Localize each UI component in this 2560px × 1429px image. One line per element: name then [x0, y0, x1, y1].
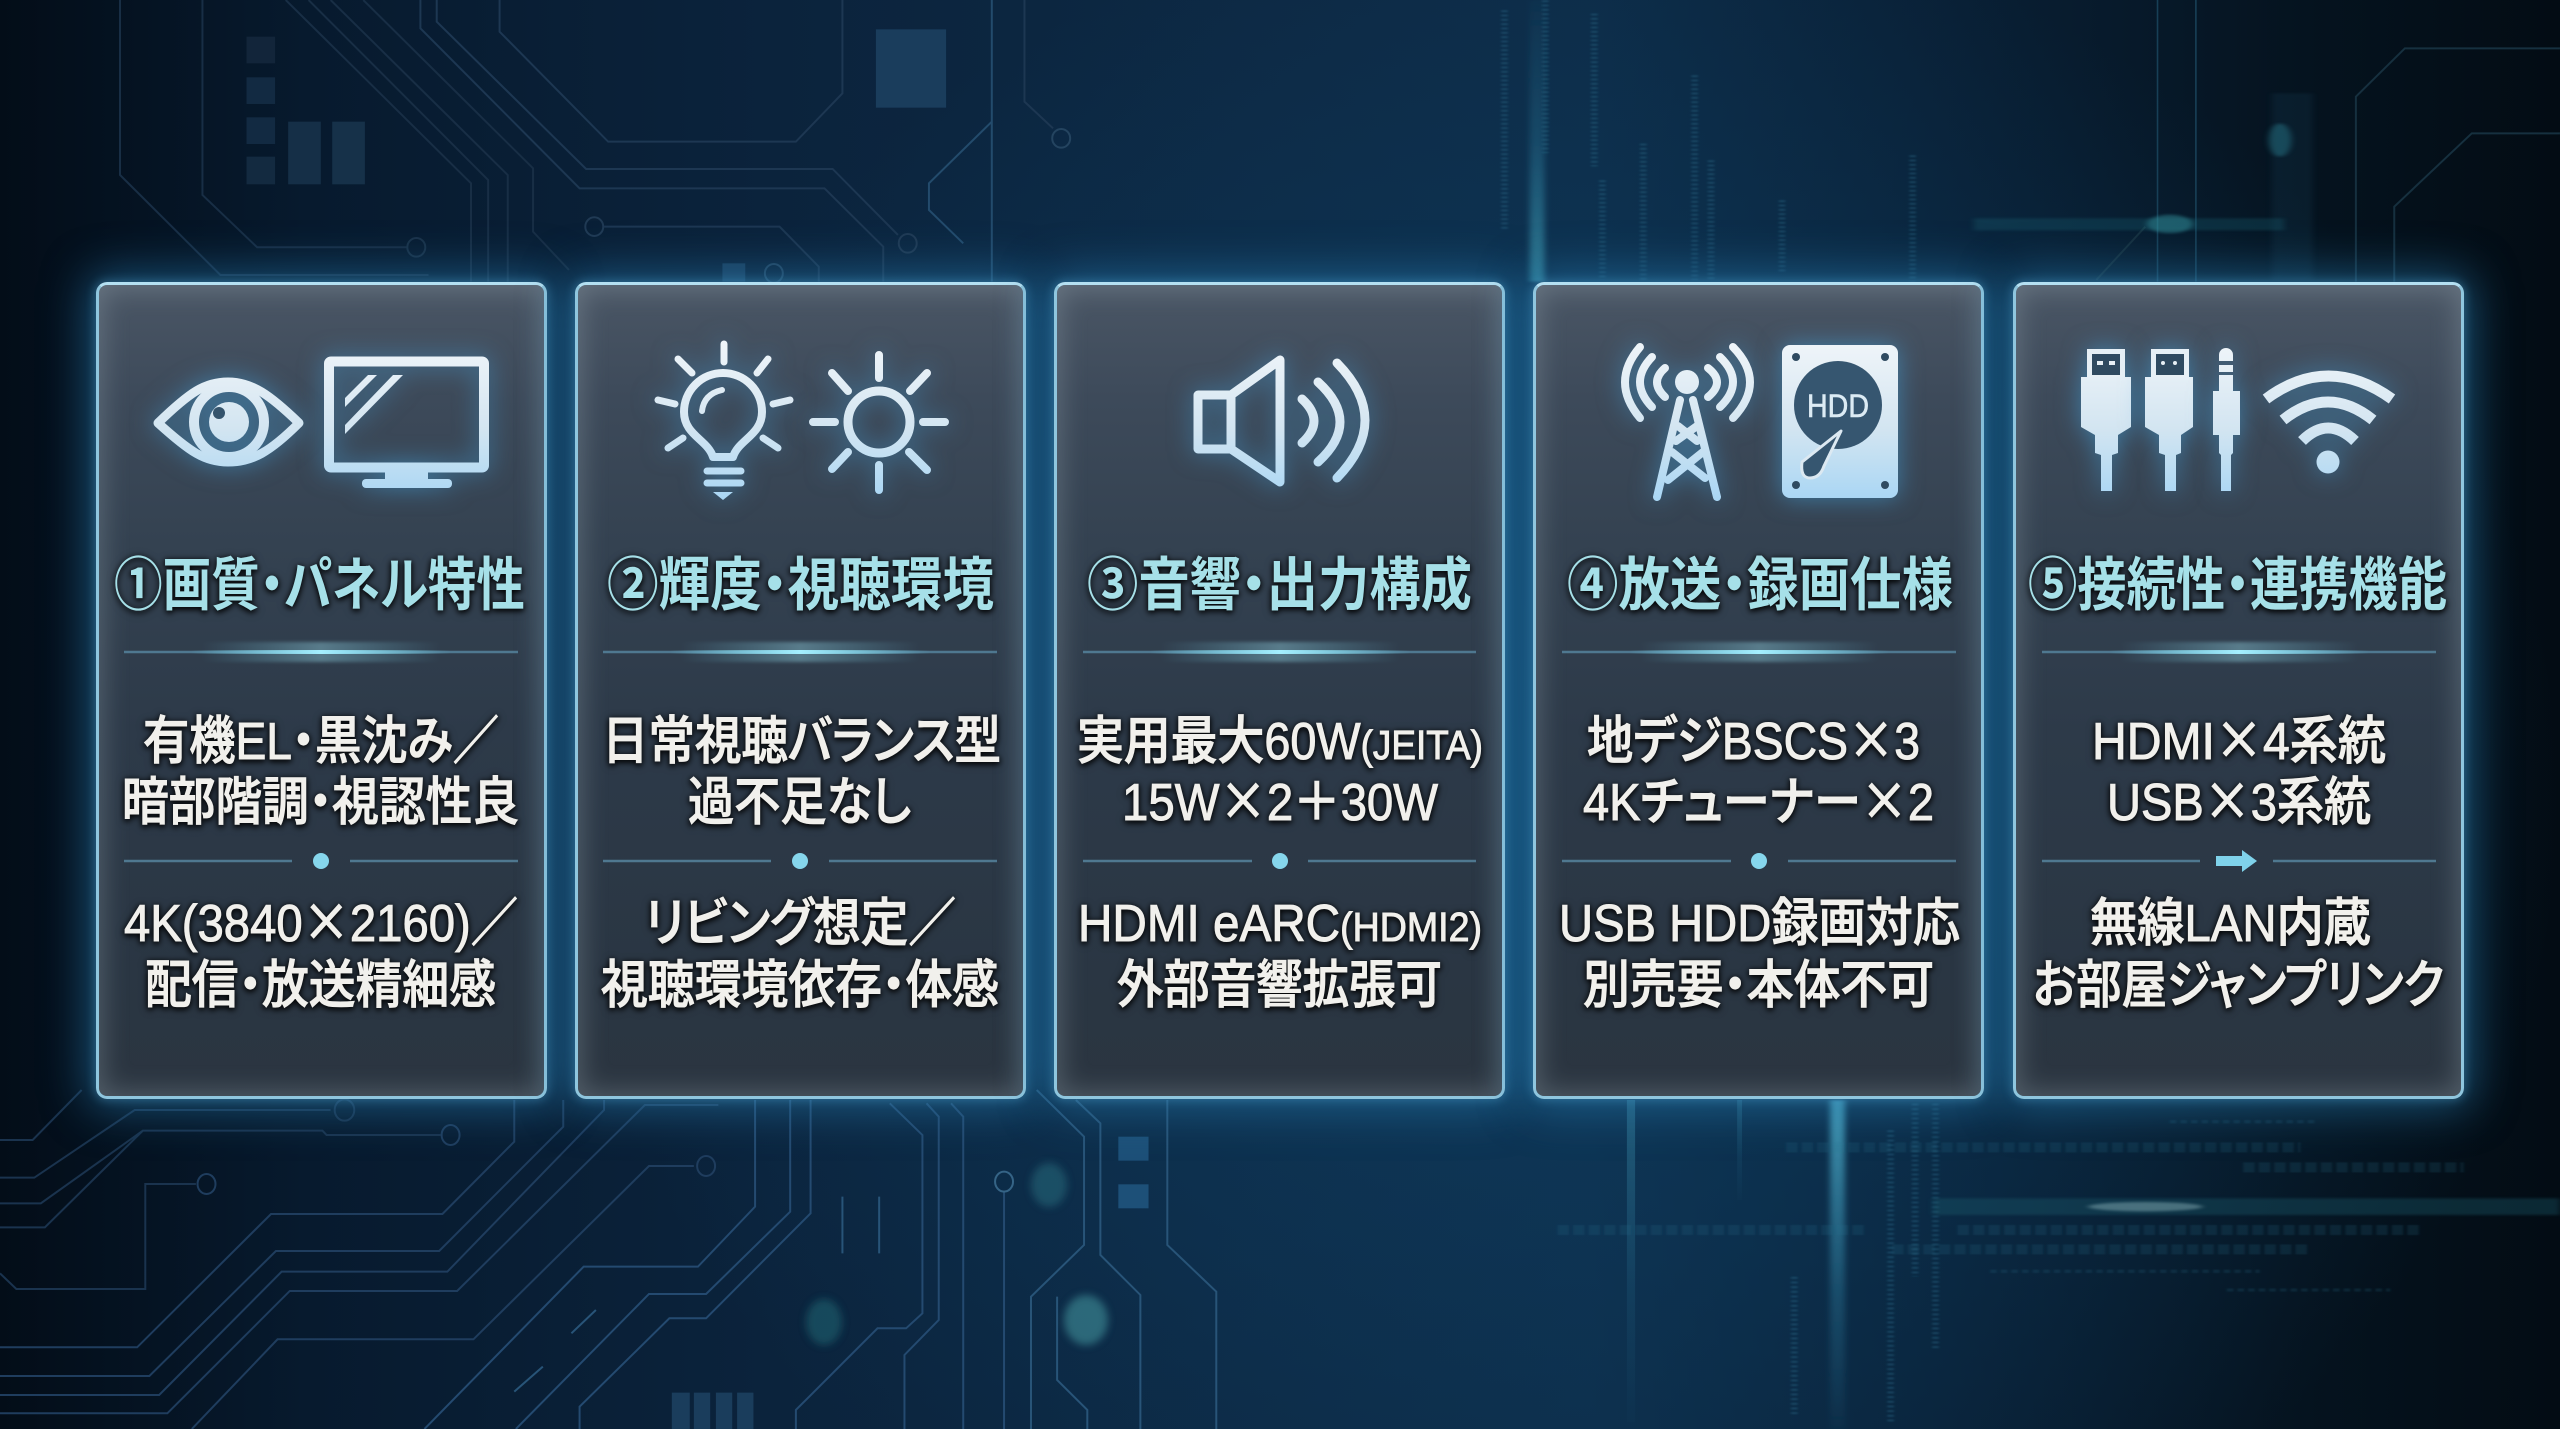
text: USB HDD recording: USB HDD録画対応 [1559, 895, 1960, 953]
text: living room: 視聴環境依存・体感 [601, 957, 999, 1015]
icon: hard disk drive: HDD [1807, 388, 1869, 424]
text: tuners [1583, 699, 1934, 835]
icon: broadcast tower [1625, 347, 1750, 497]
text: output power: 実用最大60W(JEITA) [1077, 713, 1483, 771]
divider: glowing heading rule [1083, 642, 1476, 662]
text: 有機EL: 暗部階調・視認性良 [122, 774, 519, 832]
heading: 輝度・視聴環境: ②輝度・視聴環境 [607, 553, 994, 618]
icon: hard disk drive [1782, 345, 1898, 498]
text: balance [602, 713, 1001, 832]
text: wireless LAN [2033, 895, 2444, 1015]
text: ports: HDMI×4系統 [2092, 699, 2386, 774]
text: wireless LAN: お部屋ジャンプリンク [2033, 957, 2444, 1015]
divider: glowing heading rule [2042, 642, 2436, 662]
panel: audio and output [1054, 282, 1505, 1099]
divider: glowing heading rule [603, 642, 997, 662]
icon: speaker [1198, 360, 1365, 482]
icon: USB plug [2145, 352, 2193, 491]
text: output power [1077, 713, 1483, 835]
text: living room [601, 895, 999, 1015]
heading: 放送・録画仕様: ④放送・録画仕様 [1567, 553, 1953, 618]
heading: 画質・パネル特性: ①画質・パネル特性 [114, 553, 525, 618]
text: USB HDD recording [1559, 895, 1960, 1015]
text: ports: USB×3系統 [2107, 760, 2371, 835]
icon: wifi [2266, 376, 2392, 474]
divider: dot separator [603, 853, 997, 869]
icon: audio jack [2213, 348, 2240, 491]
text: balance: 日常視聴バランス型 [602, 713, 1001, 771]
icon: television [329, 362, 484, 488]
text: tuners: 4Kチューナー×2 [1583, 760, 1934, 835]
text: wireless LAN: 無線LAN内蔵 [2090, 895, 2371, 953]
icon: HDMI plug [2081, 352, 2131, 491]
panel: brightness and viewing environment [575, 282, 1026, 1099]
heading: 音響・出力構成: ③音響・出力構成 [1087, 553, 1472, 618]
panel: picture quality and panel characteristics [96, 282, 547, 1099]
text: eARC: HDMI eARC(HDMI2) [1078, 895, 1482, 953]
text: eARC [1078, 895, 1482, 1015]
icon: sun [813, 355, 945, 490]
text: 4K resolution: 配信・放送精細感 [145, 957, 496, 1015]
divider: glowing heading rule [1562, 642, 1956, 662]
divider: arrow separator [2042, 850, 2436, 872]
panel: connectivity and integration [2013, 282, 2464, 1099]
text: ports [2092, 699, 2386, 835]
heading: 接続性・連携機能: ⑤接続性・連携機能 [2028, 553, 2447, 618]
text: 4K resolution [124, 881, 518, 1015]
icon: light bulb [658, 344, 790, 500]
divider: dot separator [124, 853, 518, 869]
text: output power: 15W×2＋30W [1122, 760, 1438, 835]
text: eARC: 外部音響拡張可 [1117, 957, 1442, 1015]
text: 有機EL: 有機EL・黒沈み／ [143, 713, 499, 771]
divider: glowing heading rule [124, 642, 518, 662]
panel: broadcast and recording [1533, 282, 1984, 1099]
text: tuners: 地デジBSCS×3 [1587, 699, 1920, 774]
text: balance: 過不足なし [688, 774, 911, 832]
divider: dot separator [1562, 853, 1956, 869]
text: 有機EL [122, 713, 519, 832]
icon: eye [158, 382, 299, 462]
text: 4K resolution: 4K(3840×2160)／ [124, 881, 518, 956]
text: USB HDD recording: 別売要・本体不可 [1583, 957, 1934, 1015]
divider: dot separator [1083, 853, 1476, 869]
text: living room: リビング想定／ [645, 895, 956, 953]
